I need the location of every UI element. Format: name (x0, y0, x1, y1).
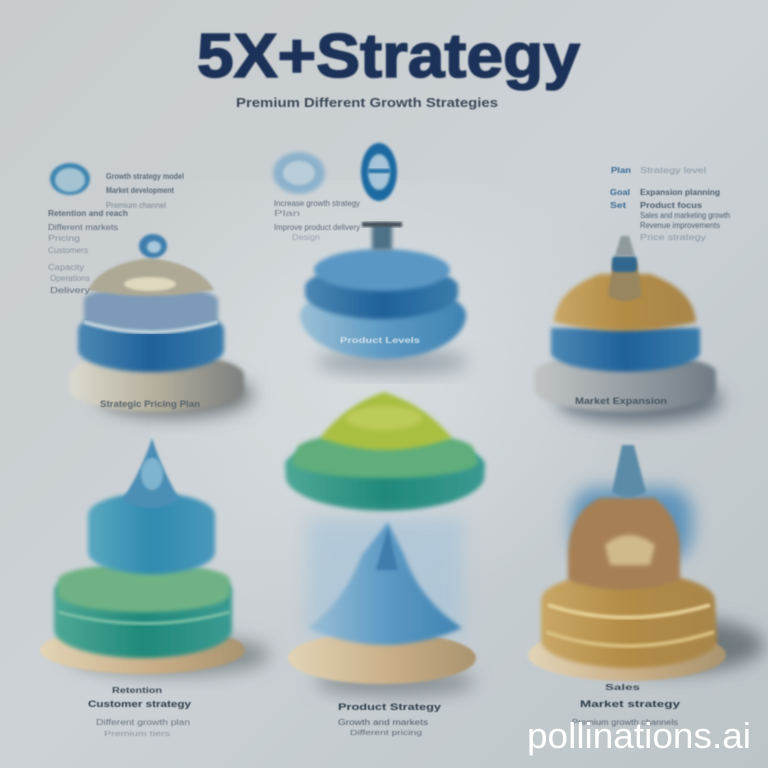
text block: top left notes: Capacity (48, 263, 84, 272)
text block: top right notes: Plan (611, 166, 631, 175)
bell: middle centre, green (285, 392, 485, 511)
text block: top right notes: Set (610, 201, 626, 210)
caption: bottom centre (338, 702, 441, 737)
label: top left bell: Strategic Pricing Plan (100, 399, 200, 409)
caption: bottom right (572, 683, 680, 727)
caption: bottom right: Premium growth channels (572, 718, 678, 727)
subtitle: Premium Different Growth Strategies (236, 96, 498, 110)
text block: top left notes: Delivery (50, 286, 90, 295)
title: 5X+Strategy (197, 22, 581, 91)
text block: top left notes: Operations (50, 274, 90, 283)
caption: bottom left: Different growth plan (96, 718, 190, 727)
icon: top centre dark circle (361, 143, 397, 201)
text block: top left notes: Market development (106, 186, 174, 195)
caption: bottom right: Sales (605, 683, 641, 692)
text block: top left notes: Growth strategy model (106, 172, 184, 181)
text block: top right notes (610, 166, 730, 242)
bell: top left, blue and silver (70, 234, 253, 417)
label: top right bell: Market Expansion (575, 396, 667, 406)
caption: bottom right: Market strategy (580, 699, 680, 709)
bell: top right, gold and blue (534, 236, 722, 422)
text block: top left notes (48, 172, 184, 295)
caption: bottom left: Retention (112, 686, 162, 695)
text block: top centre notes: Design (292, 233, 320, 242)
bell: bottom centre, blue and cream (288, 518, 476, 696)
text block: top right notes: Strategy level (640, 166, 706, 175)
text block: top centre notes: Increase growth strategy (274, 199, 360, 208)
text block: top centre notes (274, 199, 360, 242)
text block: top right notes: Expansion planning (640, 188, 720, 197)
icon: top centre pale circle (273, 152, 325, 194)
caption: bottom centre: Different pricing (350, 730, 422, 737)
caption: bottom left: Customer strategy (88, 699, 191, 709)
text block: top left notes: Premium channel (106, 201, 166, 210)
text block: top centre notes: Improve product delivery (274, 223, 360, 232)
text block: top right notes: Goal (610, 188, 630, 197)
icon: top left circle (50, 163, 90, 195)
bell: top centre, blue (300, 222, 468, 374)
watermark: pollinations.ai (527, 715, 751, 756)
text block: top left notes: Customers (48, 246, 88, 255)
caption: bottom left: Premium tiers (104, 731, 171, 738)
caption: bottom centre: Product Strategy (338, 702, 441, 712)
text block: top right notes: Revenue improvements (640, 221, 720, 230)
text block: top centre notes: Plan (274, 209, 300, 218)
bell: bottom left, teal and green (40, 438, 270, 675)
label: top centre bell: Product Levels (340, 336, 421, 345)
caption: bottom centre: Growth and markets (338, 718, 428, 727)
text block: top right notes: Product focus (640, 201, 703, 210)
text block: top left notes: Different markets (48, 223, 118, 232)
bell: bottom right, gold (528, 445, 764, 681)
text block: top right notes: Sales and marketing growth (640, 211, 730, 220)
caption: bottom left (88, 686, 191, 738)
text block: top left notes: Pricing (48, 234, 80, 243)
text block: top right notes: Price strategy (640, 233, 706, 242)
text block: top left notes: Retention and reach (48, 209, 128, 218)
